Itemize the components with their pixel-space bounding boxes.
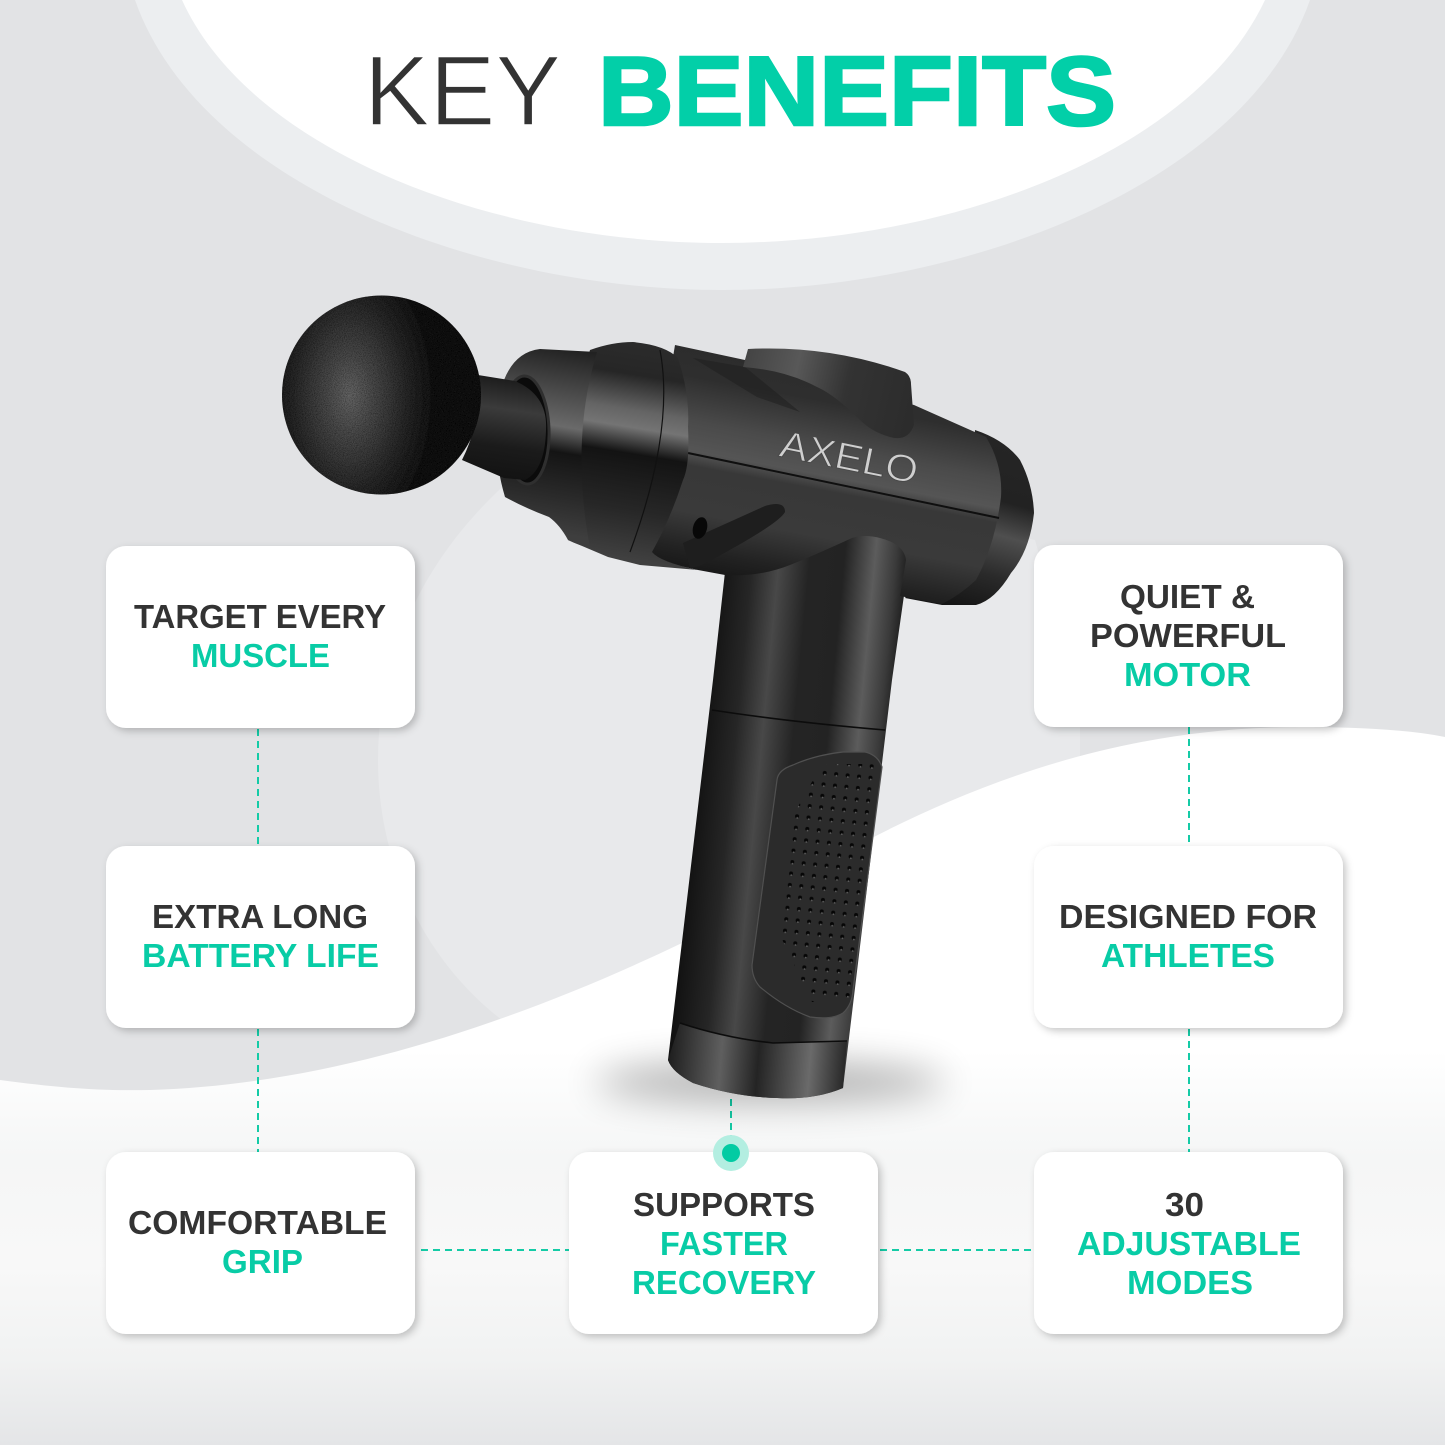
dashed connectors <box>258 727 1189 1250</box>
neck <box>462 375 546 480</box>
front ring <box>568 342 698 570</box>
card: quiet and powerful motor: QUIET & <box>1120 578 1255 615</box>
card: supports faster recovery: RECOVERY <box>632 1264 816 1301</box>
slot and hole <box>683 504 785 568</box>
card: 30 adjustable modes: 30 <box>1165 1186 1204 1223</box>
front bezel <box>496 349 597 548</box>
card: 30 adjustable modes <box>1034 1152 1343 1334</box>
card: comfortable grip: COMFORTABLE <box>128 1204 387 1241</box>
card: comfortable grip: GRIP <box>222 1243 303 1280</box>
grip handle <box>668 520 909 1098</box>
title: BENEFITS <box>598 36 1116 146</box>
card: extra long battery life: EXTRA LONG <box>152 898 368 935</box>
connector dot marker <box>713 1135 749 1171</box>
title <box>364 35 1116 146</box>
card: target every muscle: MUSCLE <box>191 637 330 674</box>
grip texture pad <box>750 750 885 1020</box>
massage ball <box>282 296 481 494</box>
main body <box>640 345 1001 604</box>
front opening <box>501 375 551 485</box>
back cap <box>905 430 1034 605</box>
card: target every muscle: TARGET EVERY <box>134 598 386 635</box>
card: extra long battery life: BATTERY LIFE <box>142 937 379 974</box>
card: 30 adjustable modes: ADJUSTABLE <box>1077 1225 1301 1262</box>
card: designed for athletes <box>1034 846 1343 1028</box>
massage gun product image <box>282 296 1034 1098</box>
card: comfortable grip <box>106 1152 415 1334</box>
card: supports faster recovery: FASTER <box>660 1225 788 1262</box>
card: designed for athletes: ATHLETES <box>1101 937 1275 974</box>
card: designed for athletes: DESIGNED FOR <box>1059 898 1317 935</box>
top button <box>743 348 914 438</box>
card: quiet and powerful motor: POWERFUL <box>1090 617 1286 654</box>
diagonal stripe <box>693 358 800 412</box>
logo: AXELO <box>776 424 922 493</box>
card: quiet and powerful motor <box>1034 545 1343 727</box>
title: KEY <box>364 35 561 146</box>
card: 30 adjustable modes: MODES <box>1127 1264 1253 1301</box>
body seam <box>688 453 999 518</box>
card: supports faster recovery <box>569 1152 878 1334</box>
card: extra long battery life <box>106 846 415 1028</box>
card: target every muscle <box>106 546 415 728</box>
card: quiet and powerful motor: MOTOR <box>1124 656 1251 693</box>
product shadow <box>595 1062 945 1102</box>
card: supports faster recovery: SUPPORTS <box>633 1186 815 1223</box>
